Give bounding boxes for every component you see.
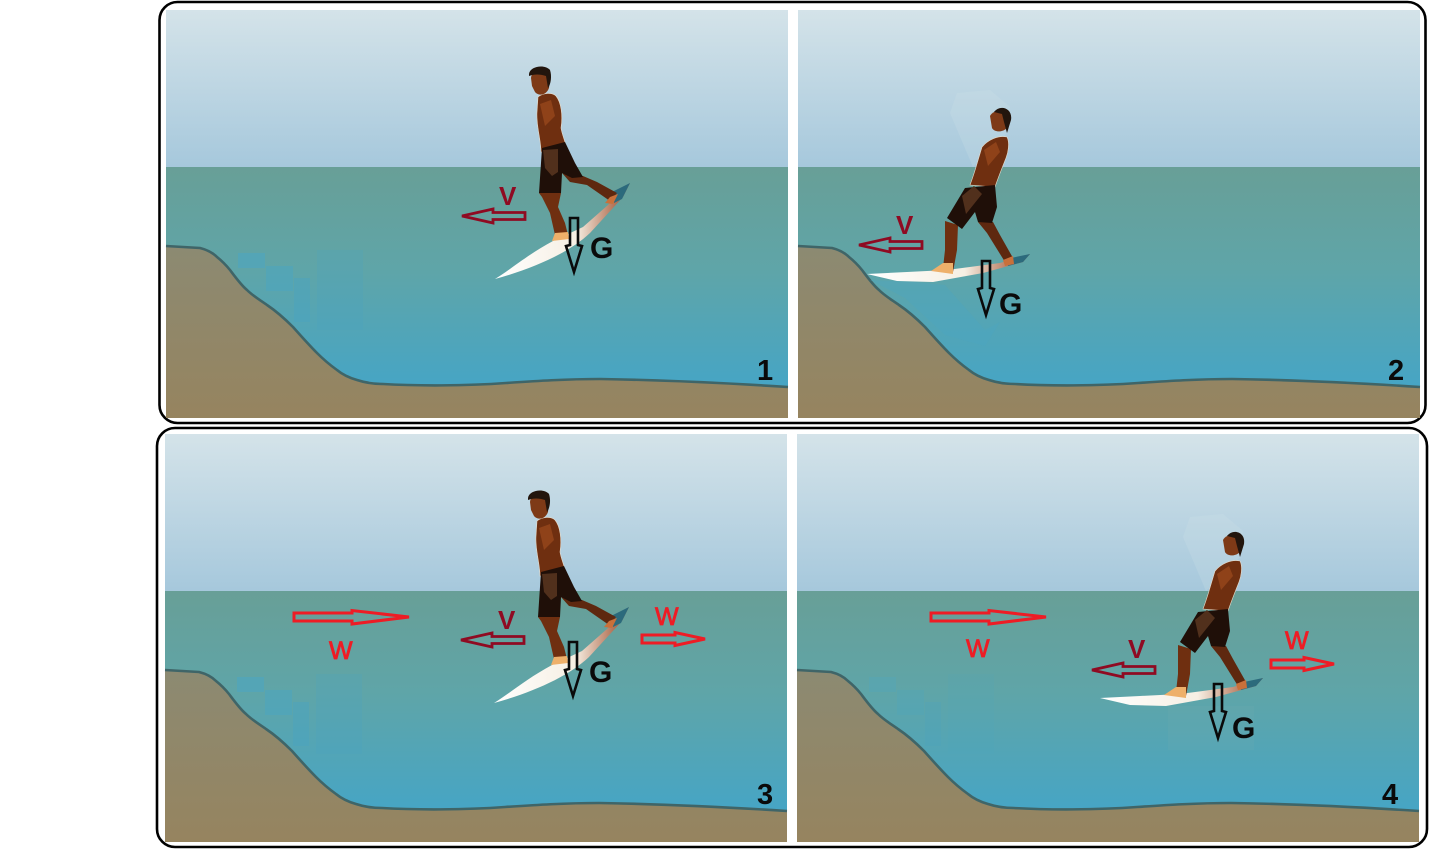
panel 3 small wave label: W <box>655 603 679 631</box>
panel 2 <box>798 10 1420 418</box>
panel 4 small wave label: W <box>1285 627 1309 655</box>
panel 2 velocity arrow <box>859 238 922 252</box>
panel 4 large wave arrow <box>931 610 1046 624</box>
panel 1 <box>166 10 788 418</box>
panel 1 surfer <box>495 67 630 279</box>
panel 2 halo around surfer <box>950 90 1010 167</box>
panel 4 background: sky, sea, seabed <box>797 434 1419 842</box>
panel 1 gravity arrow <box>566 218 582 272</box>
panel 1 velocity arrow <box>462 209 525 223</box>
panel 3 gravity label: G <box>589 656 612 689</box>
frame: bottom row <box>157 428 1427 847</box>
panel 3 water patches <box>237 674 362 754</box>
panel 3 velocity label: V <box>498 605 516 635</box>
panel 1 background: sky, sea, seabed <box>166 10 788 418</box>
panel 4 number: 4 <box>1382 779 1398 811</box>
panel 3 number: 3 <box>757 779 773 811</box>
panel 4 <box>797 434 1419 842</box>
panel 3 <box>165 434 787 842</box>
panel 3 small wave arrow <box>642 632 705 646</box>
panel 4 large wave label: W <box>966 635 990 663</box>
panel 3 large wave arrow <box>294 610 409 624</box>
panel 1 water patches <box>238 250 363 330</box>
panel 4 water patches <box>869 674 994 754</box>
panel 4 small wave arrow <box>1271 658 1334 670</box>
panel 3 background: sky, sea, seabed <box>165 434 787 842</box>
panel 3 large wave label: W <box>329 637 353 665</box>
panel 4 patch behind gravity arrow <box>1168 706 1254 750</box>
panel 1 number: 1 <box>757 355 773 387</box>
panel 2 gravity arrow <box>978 261 994 315</box>
panel 4 halo around surfer <box>1183 514 1243 591</box>
panel 3 velocity arrow <box>461 633 524 647</box>
panel 4 gravity arrow <box>1210 684 1226 738</box>
panel 2 background: sky, sea, seabed <box>798 10 1420 418</box>
panel 4 velocity arrow <box>1092 663 1155 677</box>
panel 3 surfer <box>494 491 629 703</box>
panel 4 surfer <box>1100 532 1263 706</box>
panel 2 number: 2 <box>1388 355 1404 387</box>
frame: top row <box>160 2 1426 423</box>
panel 1 velocity label: V <box>499 181 517 211</box>
panel 2 water patches near shore <box>870 280 1000 346</box>
panel 4 gravity label: G <box>1232 712 1255 745</box>
panel 2 gravity label: G <box>999 288 1022 321</box>
panel 4 velocity label: V <box>1128 634 1146 664</box>
panel 2 velocity label: V <box>896 210 914 240</box>
panel 2 surfer <box>867 108 1030 282</box>
panel 3 gravity arrow <box>565 642 581 696</box>
panel 1 gravity label: G <box>590 232 613 265</box>
